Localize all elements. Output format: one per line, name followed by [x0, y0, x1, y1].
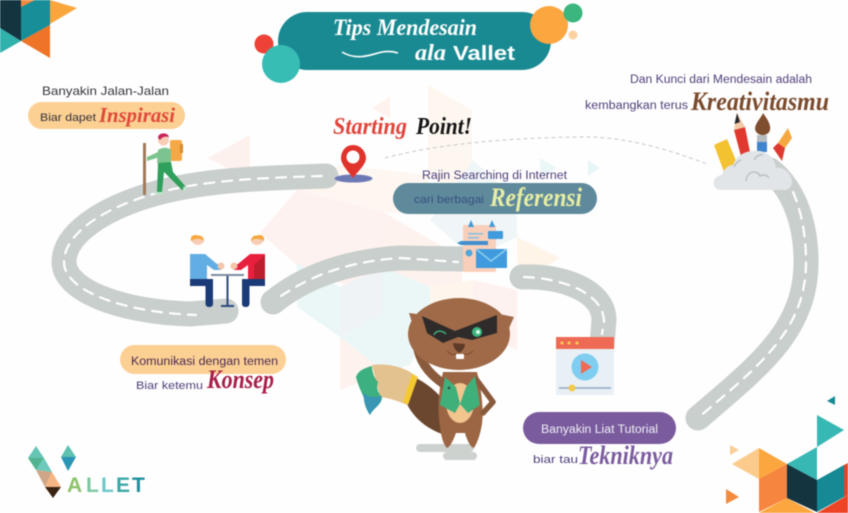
lead text: biar tau	[533, 454, 578, 466]
script word: Kreativitasmu	[690, 87, 829, 116]
pen	[773, 128, 792, 161]
step 4 label: technique	[523, 412, 676, 470]
raised arm	[418, 350, 445, 385]
pill text: cari berbagai	[414, 194, 484, 206]
teeth	[456, 354, 464, 359]
icon: creative tools on cloud	[714, 113, 792, 190]
smile	[447, 351, 473, 355]
road segments	[64, 170, 806, 418]
mask	[422, 315, 497, 343]
pill text: Biar dapet	[40, 112, 96, 124]
hip arm	[476, 379, 493, 413]
heading: Banyakin Jalan-Jalan	[42, 84, 169, 98]
swoosh	[342, 52, 398, 57]
title line 2 bold: Vallet	[453, 43, 515, 65]
nose	[453, 343, 465, 353]
character: squirrel mascot	[356, 298, 514, 460]
starting point label	[333, 114, 472, 140]
head	[408, 298, 514, 370]
belly	[446, 383, 474, 423]
corner decoration: bottom right triangles	[726, 396, 848, 513]
script word: Referensi	[489, 183, 583, 212]
icon: video player	[556, 337, 614, 395]
title line 2 script: ala	[415, 40, 446, 65]
logo wordmark: L	[101, 474, 114, 497]
step 1 label: inspiration	[28, 84, 185, 129]
logo mark	[28, 445, 76, 498]
title banner	[254, 4, 582, 83]
step 2 label: concept	[120, 345, 286, 394]
road 4: tutorial to creativity	[698, 170, 806, 418]
dashed route line	[385, 137, 707, 164]
corner decoration: top left triangles	[0, 0, 77, 58]
pill text: Komunikasi dengan temen	[131, 356, 278, 368]
logo wordmark: T	[132, 474, 145, 497]
paint brush	[755, 113, 770, 152]
icon: hiker	[143, 133, 188, 195]
cloud	[714, 151, 792, 190]
icon: two people at a table	[190, 235, 265, 307]
step 3 label: references	[393, 170, 597, 214]
table	[211, 274, 244, 307]
right person	[230, 235, 265, 307]
starting word: Starting	[333, 114, 407, 140]
road 1: start to meeting	[64, 176, 326, 315]
open eye	[472, 327, 482, 337]
pill text: Banyakin Liat Tutorial	[541, 424, 658, 436]
final label: creativity	[585, 74, 829, 116]
lead text: kembangkan terus	[585, 100, 688, 112]
logo wordmark: L	[86, 474, 99, 497]
tail	[356, 365, 447, 434]
icon: location pin	[334, 145, 372, 182]
road 2: meeting to references	[273, 258, 465, 302]
vest	[440, 376, 480, 413]
logo: Vallet	[28, 445, 145, 498]
body	[439, 372, 483, 448]
left person	[190, 235, 224, 307]
script word: Inspirasi	[98, 103, 175, 127]
title decorative circles	[254, 4, 582, 83]
icon: search and mail	[457, 220, 507, 272]
pill	[120, 345, 286, 374]
ruler	[714, 139, 737, 172]
pill	[523, 412, 676, 444]
pill	[28, 102, 185, 129]
road 3: references to tutorial	[522, 277, 604, 345]
logo wordmark: E	[116, 474, 130, 497]
heading: Rajin Searching di Internet	[422, 170, 568, 182]
winking eye	[434, 331, 446, 335]
pencil	[734, 113, 751, 160]
banner pill	[278, 12, 551, 70]
pill	[393, 183, 597, 214]
lead text: Biar ketemu	[136, 380, 203, 392]
shadows	[416, 444, 474, 452]
script word: Konsep	[206, 365, 274, 394]
script word: Tekniknya	[578, 441, 673, 470]
title line 1: Tips Mendesain	[333, 15, 477, 40]
heading: Dan Kunci dari Mendesain adalah	[630, 74, 812, 86]
point word: Point!	[415, 114, 472, 140]
logo wordmark: A	[67, 474, 82, 497]
